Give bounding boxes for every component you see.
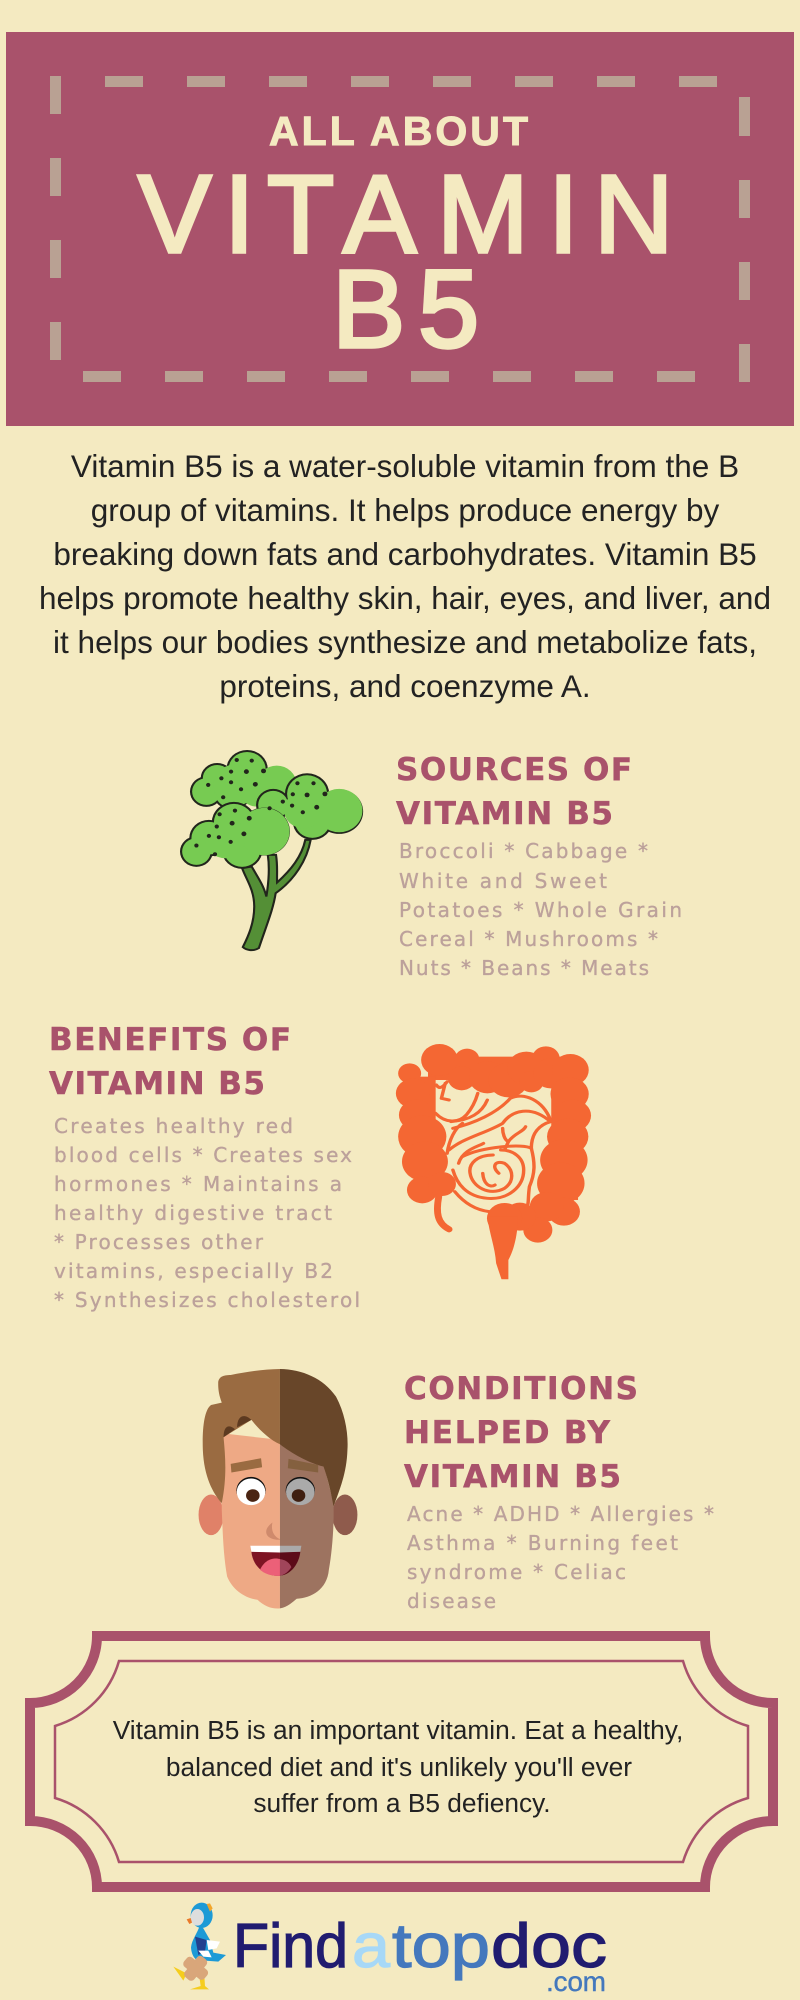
text block: introduction: helps promote healthy skin, hair, eyes, and liver, and xyxy=(39,580,771,616)
text block: sources list xyxy=(399,839,682,980)
heading: conditions helped by vitamin b5: HELPED BY xyxy=(404,1415,611,1451)
text block: closing message: Vitamin B5 is an important vitamin. Eat a healthy, xyxy=(113,1715,683,1745)
icon: face xyxy=(199,1369,357,1609)
heading: sources of vitamin b5 xyxy=(396,752,632,832)
domain suffix: .com xyxy=(546,1966,606,1997)
heading: sources of vitamin b5: SOURCES OF xyxy=(396,752,632,788)
text block: benefits list: Creates healthy red xyxy=(54,1114,293,1138)
text block: sources list: Nuts * Beans * Meats xyxy=(399,956,649,980)
text block: introduction: group of vitamins. It helps produce energy by xyxy=(91,492,720,528)
logo: findatopdoc xyxy=(173,1903,607,1997)
heading: benefits of vitamin b5: BENEFITS OF xyxy=(49,1022,291,1058)
text block: closing message xyxy=(113,1715,683,1818)
text block: introduction: breaking down fats and carbohydrates. Vitamin B5 xyxy=(53,536,757,572)
text block: conditions list: Acne * ADHD * Allergies * xyxy=(407,1502,714,1526)
text block: sources list: Potatoes * Whole Grain xyxy=(399,898,682,922)
text block: benefits list: * Synthesizes cholesterol xyxy=(54,1288,360,1312)
heading: b5: B5 xyxy=(332,248,479,371)
panel: title banner xyxy=(6,32,794,426)
text block: conditions list xyxy=(407,1502,714,1613)
heading: all about: ALL ABOUT xyxy=(269,108,528,154)
heading: conditions helped by vitamin b5: CONDITIONS xyxy=(404,1371,638,1407)
text block: conditions list: Asthma * Burning feet xyxy=(407,1531,678,1555)
heading: conditions helped by vitamin b5 xyxy=(404,1371,638,1495)
text block: introduction: it helps our bodies synthesize and metabolize fats, xyxy=(53,624,757,660)
callout: summary frame xyxy=(30,1636,773,1887)
wordmark: a xyxy=(352,1912,391,1981)
text block: closing message: suffer from a B5 defiency. xyxy=(253,1788,551,1818)
text block: benefits list: vitamins, especially B2 xyxy=(54,1259,333,1283)
icon: broccoli xyxy=(180,750,363,950)
text block: sources list: Broccoli * Cabbage * xyxy=(399,839,648,863)
panel: conditions xyxy=(199,1369,714,1613)
wordmark: Find xyxy=(233,1912,348,1981)
text block: closing message: balanced diet and it's unlikely you'll ever xyxy=(166,1752,632,1782)
heading: sources of vitamin b5: VITAMIN B5 xyxy=(396,796,613,832)
text block: benefits list: hormones * Maintains a xyxy=(54,1172,342,1196)
heading: vitamin: VITAMIN xyxy=(138,153,673,276)
wordmark: top xyxy=(392,1912,490,1981)
text block: introduction: Vitamin B5 is a water-soluble vitamin from the B xyxy=(71,448,739,484)
icon: duck mascot xyxy=(173,1903,226,1989)
panel: sources xyxy=(180,750,682,980)
text block: benefits list xyxy=(54,1114,360,1312)
heading: benefits of vitamin b5 xyxy=(49,1022,291,1102)
text block: conditions list: syndrome * Celiac xyxy=(407,1560,626,1584)
text block: benefits list: blood cells * Creates sex xyxy=(54,1143,352,1167)
text block: introduction xyxy=(39,448,771,704)
text block: benefits list: * Processes other xyxy=(54,1230,264,1254)
wordmark: doc xyxy=(491,1912,607,1981)
icon: intestines xyxy=(396,1044,591,1279)
wordmark xyxy=(233,1912,607,1981)
text block: sources list: White and Sweet xyxy=(399,869,607,893)
text block: conditions list: disease xyxy=(407,1589,496,1613)
text block: introduction: proteins, and coenzyme A. xyxy=(219,668,591,704)
text block: benefits list: healthy digestive tract xyxy=(54,1201,332,1225)
panel: benefits xyxy=(49,1022,591,1312)
text block: sources list: Cereal * Mushrooms * xyxy=(399,927,658,951)
heading: conditions helped by vitamin b5: VITAMIN B5 xyxy=(404,1459,621,1495)
heading: benefits of vitamin b5: VITAMIN B5 xyxy=(49,1066,265,1102)
